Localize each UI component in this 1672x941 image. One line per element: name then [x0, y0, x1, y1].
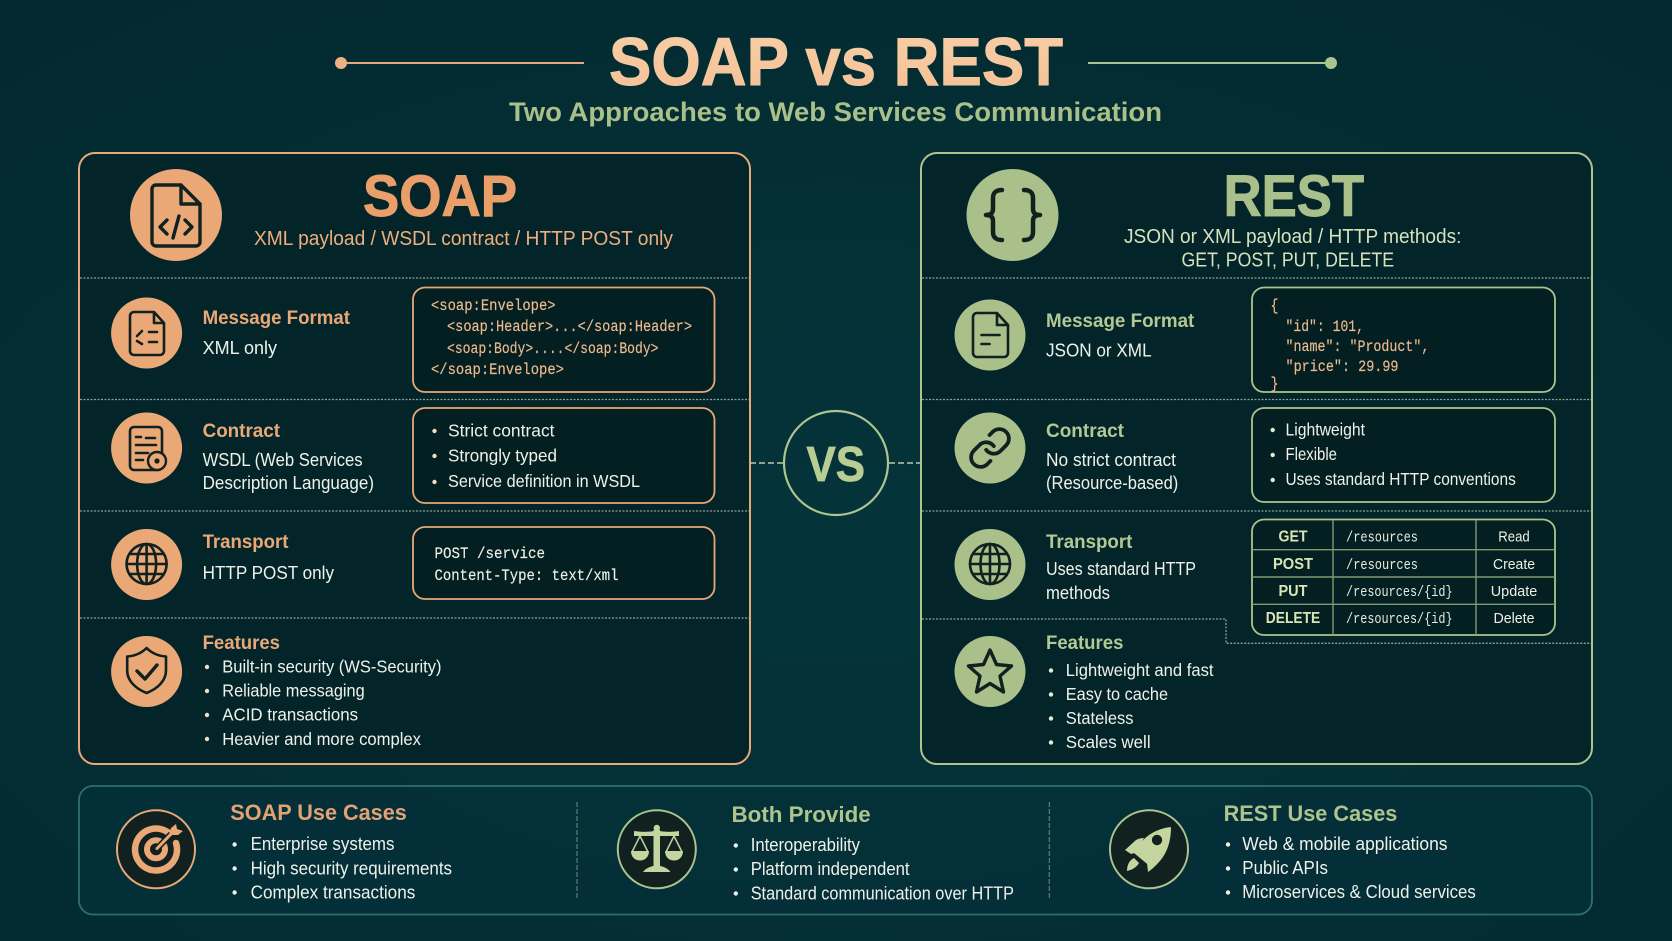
icon: contract document [111, 412, 182, 484]
HTTP methods table: PUT [1278, 583, 1308, 600]
row: REST features [954, 633, 1214, 752]
REST summary [1124, 226, 1461, 272]
JSON code box: { [1270, 297, 1278, 315]
contract value: Description Language) [203, 473, 374, 493]
icon: chain link [954, 412, 1026, 484]
features list: ACID transactions [222, 705, 358, 725]
contract value: WSDL (Web Services [203, 450, 363, 470]
contract bullets box: Lightweight [1286, 420, 1365, 440]
icon: star [954, 636, 1026, 707]
VS badge [750, 411, 921, 515]
features heading: Features [203, 633, 280, 654]
transport value: HTTP POST only [203, 563, 334, 583]
message format heading: Message Format [1046, 311, 1195, 332]
REST use cases list: Web & mobile applications [1242, 834, 1448, 854]
title right ornament [1088, 57, 1337, 69]
contract bullets box: Strict contract [448, 421, 555, 441]
XML code box: <soap:Body>....</soap:Body> [447, 340, 658, 358]
column: REST use cases [1110, 801, 1476, 902]
icon: globe [111, 529, 182, 600]
JSON code box: "id": 101, [1286, 318, 1364, 336]
REST use cases list: Public APIs [1242, 858, 1328, 878]
HTTP methods table: /resources/{id} [1346, 611, 1453, 628]
icon: shield [111, 636, 182, 707]
HTTP methods table: DELETE [1266, 610, 1320, 627]
features heading: Features [1046, 633, 1123, 654]
row: REST transport [954, 520, 1555, 635]
panel: REST [921, 153, 1592, 764]
XML code box: </soap:Envelope> [431, 361, 564, 379]
JSON code box: "name": "Product", [1286, 338, 1429, 356]
HTTP methods table: Read [1498, 529, 1530, 546]
contract bullets box [1252, 408, 1555, 502]
both provide list: Platform independent [751, 859, 910, 879]
XML code box [413, 288, 714, 392]
message format value: XML only [203, 338, 277, 358]
SOAP use cases heading: SOAP Use Cases [230, 800, 407, 825]
HTTP methods table: /resources [1346, 557, 1418, 574]
HTTP methods table: /resources/{id} [1346, 584, 1453, 601]
SOAP use cases list [232, 834, 452, 902]
subtitle: Two Approaches to Web Services Communication [509, 97, 1162, 127]
contract bullets box: Uses standard HTTP conventions [1286, 469, 1516, 489]
transport value: Uses standard HTTP [1046, 559, 1196, 579]
icon: globe [954, 529, 1026, 600]
SOAP use cases list: High security requirements [251, 858, 452, 878]
features list: Scales well [1066, 732, 1151, 752]
row: REST contract [954, 408, 1555, 502]
REST use cases heading: REST Use Cases [1224, 801, 1397, 826]
icon: SOAP code file [130, 169, 222, 261]
icon: XML document [111, 298, 182, 368]
transport code box: POST /service [434, 545, 545, 563]
transport code box [413, 527, 714, 599]
features list [205, 657, 442, 749]
contract bullets box: Strongly typed [448, 446, 557, 466]
contract value [203, 450, 374, 493]
transport heading: Transport [203, 532, 289, 553]
features list: Reliable messaging [222, 681, 365, 701]
XML code box: <soap:Envelope> [431, 297, 556, 315]
row: SOAP message format [111, 288, 715, 392]
contract bullets box: Service definition in WSDL [448, 471, 640, 491]
features list: Lightweight and fast [1066, 660, 1214, 680]
XML code box: <soap:Header>...</soap:Header> [447, 318, 692, 336]
icon: scales [618, 810, 696, 888]
both provide list: Standard communication over HTTP [751, 883, 1014, 903]
row: REST message format [954, 288, 1555, 393]
row: SOAP contract [111, 408, 715, 503]
title left ornament [335, 57, 584, 69]
icon: rocket [1110, 810, 1188, 888]
contract value: (Resource-based) [1046, 473, 1178, 493]
HTTP methods table: Update [1491, 583, 1537, 600]
HTTP methods table [1252, 520, 1555, 635]
message format value: JSON or XML [1046, 341, 1152, 361]
JSON code box: "price": 29.99 [1286, 358, 1398, 376]
panel: SOAP [79, 153, 750, 764]
contract value: No strict contract [1046, 450, 1176, 470]
title block [335, 24, 1337, 127]
icon: target [117, 810, 195, 888]
JSON code box: } [1270, 375, 1278, 393]
row: SOAP features [111, 633, 442, 749]
HTTP methods table: /resources [1346, 530, 1418, 547]
message format heading: Message Format [203, 308, 351, 329]
SOAP heading: SOAP [363, 164, 517, 229]
SOAP use cases list: Complex transactions [251, 882, 415, 902]
row: SOAP transport [111, 527, 715, 600]
REST use cases list [1226, 834, 1476, 902]
both provide heading: Both Provide [732, 802, 871, 827]
SOAP use cases list: Enterprise systems [251, 834, 394, 854]
features list: Built-in security (WS-Security) [222, 657, 442, 677]
contract heading: Contract [203, 421, 281, 442]
VS badge: VS [806, 438, 865, 492]
HTTP methods table: Create [1493, 556, 1535, 573]
panel: use cases [79, 786, 1592, 914]
SOAP summary: XML payload / WSDL contract / HTTP POST only [254, 228, 673, 250]
contract value [1046, 450, 1178, 493]
REST summary: JSON or XML payload / HTTP methods: [1124, 226, 1461, 248]
contract heading: Contract [1046, 421, 1125, 442]
transport value [1046, 559, 1196, 603]
HTTP methods table: POST [1273, 556, 1314, 573]
icon: curly braces [966, 169, 1058, 261]
REST use cases list: Microservices & Cloud services [1242, 882, 1476, 902]
both provide list [734, 835, 1014, 903]
features list: Stateless [1066, 708, 1134, 728]
contract bullets box [413, 408, 714, 503]
column: both provide [618, 802, 1014, 903]
contract bullets box: Flexible [1286, 444, 1337, 464]
HTTP methods table: GET [1278, 529, 1308, 546]
features list: Easy to cache [1066, 684, 1168, 704]
features list [1049, 660, 1214, 752]
title: SOAP vs REST [609, 24, 1063, 100]
REST summary: GET, POST, PUT, DELETE [1182, 250, 1394, 272]
icon: document [954, 300, 1026, 370]
features list: Heavier and more complex [222, 729, 421, 749]
HTTP methods table: Delete [1494, 610, 1534, 627]
REST heading: REST [1224, 164, 1364, 229]
both provide list: Interoperability [751, 835, 860, 855]
transport value: methods [1046, 583, 1110, 603]
transport heading: Transport [1046, 532, 1133, 553]
JSON code box [1252, 288, 1555, 393]
column: SOAP use cases [117, 800, 452, 902]
transport code box: Content-Type: text/xml [434, 567, 618, 585]
